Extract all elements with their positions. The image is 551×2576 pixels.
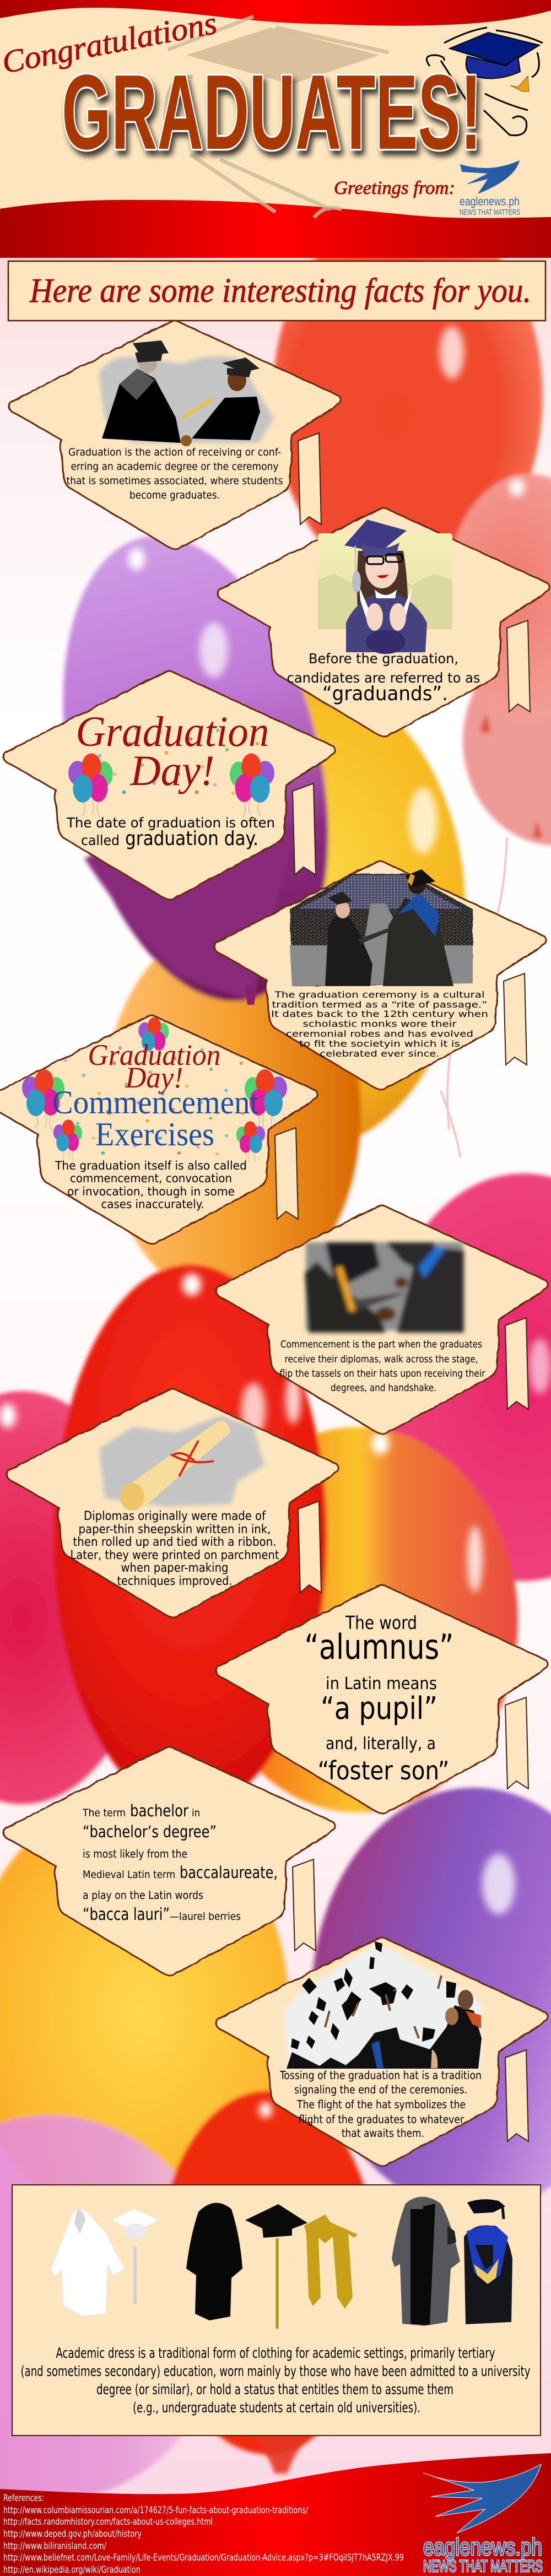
caption: celebrated ever since. (320, 1048, 440, 1059)
caption (287, 651, 480, 705)
cap shape (7, 1389, 339, 1617)
caption: baccalaureate, (180, 1863, 278, 1882)
fact cap 10: tossing hats (216, 1938, 548, 2166)
fact cap 9: bachelor (3, 1747, 336, 1976)
caption: “bachelor’s degree” (83, 1822, 217, 1841)
illustration: rolled diploma (99, 1416, 264, 1511)
caption: or invocation, though in some (67, 1185, 235, 1198)
references: http://www.deped.gov.ph/about/history (3, 2529, 142, 2540)
bookmark ribbon (504, 973, 527, 1065)
caption: to fit the societyin which it is (299, 1038, 460, 1049)
caption: that awaits them. (342, 2126, 424, 2140)
references (3, 2493, 404, 2575)
artwork: Graduation Day: Graduation (76, 707, 269, 755)
caption (280, 1339, 485, 1394)
cap shape (216, 1205, 548, 1434)
references: http://en.wikipedia.org/wiki/Graduation (3, 2564, 141, 2575)
photo: tossed caps (284, 1941, 482, 2069)
caption: Later, they were printed on parchment (71, 1549, 279, 1562)
caption: erring an academic degree or the ceremony (71, 461, 279, 473)
panel: academic dress (12, 2185, 541, 2436)
cap shape (3, 1747, 336, 1976)
caption: “a pupil” (321, 1691, 437, 1727)
caption: receive their diplomas, walk across the stage, (284, 1354, 478, 1365)
references: http://facts.randomhistory.com/facts-about-us-colleges.html (3, 2517, 213, 2528)
cap shape (218, 508, 550, 737)
bookmark ribbon (507, 620, 530, 712)
artwork: commencement exercises: Graduation (88, 1038, 220, 1071)
heading: Congratulations: Congratulations (0, 5, 220, 80)
logo: eaglenews: eaglenews.ph (460, 194, 520, 208)
photo: ceremony handshake (290, 869, 473, 986)
black gown, cap, tassel and gold stole (186, 2203, 358, 2329)
caption (55, 1159, 247, 1211)
logo: eaglenews footer (423, 2464, 543, 2575)
caption: then rolled up and tied with a ribbon. (73, 1535, 277, 1549)
caption: Graduation is the action of receiving or conf- (68, 446, 281, 458)
caption: scholastic monks wore their (303, 1019, 457, 1029)
caption: is most likely from the (83, 1847, 187, 1860)
caption (66, 815, 275, 850)
caption (66, 446, 283, 501)
references: http://www.biliranisland.com/ (3, 2541, 107, 2552)
fact cap 7: diplomas (7, 1389, 339, 1617)
references: http://www.columbiamissourian.com/a/174627/5-fun-facts-about-graduation-traditions/ (3, 2505, 309, 2516)
caption: candidates are referred to as (287, 670, 480, 686)
caption: called (81, 832, 120, 848)
caption (71, 1509, 279, 1588)
artwork: Graduation Day (68, 707, 274, 818)
bookmark ribbon (505, 1697, 528, 1789)
header panel (0, 0, 551, 258)
bookmark ribbon (298, 1501, 321, 1593)
caption: The date of graduation is often (66, 815, 275, 831)
caption: degrees, and handshake. (331, 1382, 436, 1394)
caption (304, 1612, 454, 1785)
caption: tradition termed as a “rite of passage.” (272, 999, 487, 1010)
bookmark ribbon (298, 433, 321, 524)
caption: Before the graduation, (309, 651, 458, 667)
caption: The graduation ceremony is a cultural (274, 989, 485, 1000)
caption: “bacca lauri” (83, 1905, 170, 1924)
caption: Tossing of the graduation hat is a tradition (279, 2069, 482, 2082)
cap shape (0, 1015, 318, 1244)
doctoral gown, tam and hood (392, 2197, 512, 2326)
bookmark ribbon (293, 1859, 316, 1951)
caption: bachelor (130, 1801, 188, 1820)
fact cap 8: alumnus (216, 1585, 548, 1814)
references: http://www.beliefnet.com/Love-Family/Life-Events/Graduation/Graduation-Advice.aspx?p=3#FOqiISJT7hA5RZJX.99 (3, 2552, 404, 2563)
caption: flight of the graduates to whatever (299, 2113, 464, 2126)
caption: cases inaccurately. (101, 1198, 204, 1211)
photo: diploma handshake close-up (305, 1242, 464, 1333)
caption: —laurel berries (170, 1911, 241, 1923)
caption (279, 2069, 482, 2140)
bookmark ribbon (505, 2050, 528, 2141)
caption: become graduates. (129, 489, 220, 501)
caption: Commencement is the part when the graduates (280, 1339, 482, 1350)
caption: (e.g., undergraduate students at certain old universities). (133, 2400, 420, 2416)
logo: eaglenews: NEWS THAT MATTERS (460, 208, 520, 217)
caption (21, 2345, 531, 2416)
caption: “graduands”. (322, 683, 448, 705)
caption: degree (or similar), or hold a status that entitles them to assume them (96, 2382, 453, 2398)
cap shape (9, 321, 341, 549)
icon: graduation cap and diploma (426, 28, 543, 136)
fact cap 2: graduands (218, 508, 550, 737)
caption: “foster son” (317, 1756, 450, 1785)
caption: “alumnus” (304, 1627, 454, 1667)
caption: and, literally, a (326, 1734, 436, 1754)
caption: The flight of the hat symbolizes the (296, 2098, 466, 2111)
caption: when paper-making (121, 1561, 228, 1575)
caption: The graduation itself is also called (55, 1159, 247, 1172)
caption: Medieval Latin term (83, 1869, 175, 1881)
footer band (0, 2453, 551, 2576)
banner: interesting facts (8, 261, 545, 321)
bookmark ribbon (293, 783, 316, 875)
caption: commencement, convocation (70, 1172, 232, 1185)
bookmark ribbon (505, 1318, 528, 1409)
white gown, cap and tassel (51, 2209, 159, 2316)
caption: in (192, 1807, 200, 1819)
artwork: commencement exercises: Commencement (52, 1084, 259, 1121)
fact cap 1: definition of graduation (9, 321, 341, 549)
caption: It dates back to the 12th century when (271, 1009, 488, 1019)
illustration: girl graduate (318, 519, 452, 654)
cap shape (216, 1585, 548, 1814)
logo: eaglenews (460, 160, 520, 217)
caption (271, 989, 488, 1059)
cap shape (214, 861, 547, 1090)
artwork: commencement exercises: Exercises (95, 1116, 214, 1152)
bookmark ribbon (275, 1128, 298, 1219)
cap shape (3, 671, 336, 900)
fact cap 4: rite of passage (214, 861, 547, 1090)
fact cap 3: graduation day (3, 671, 336, 900)
artwork: commencement exercises (22, 1017, 287, 1163)
caption: a play on the Latin words (83, 1888, 203, 1902)
caption: The term (82, 1807, 126, 1819)
faint cap watermark (165, 17, 388, 218)
artwork: Graduation Day: Day! (130, 746, 215, 794)
references: References: (3, 2493, 44, 2504)
caption: that is sometimes associated, where students (66, 475, 283, 487)
fact cap 6: commencement definition (216, 1205, 548, 1434)
caption (82, 1801, 278, 1924)
artwork: commencement exercises: Day! (125, 1061, 183, 1094)
caption: The word (345, 1612, 417, 1633)
cap shape (216, 1938, 548, 2166)
caption: paper-thin sheepskin written in ink, (78, 1523, 271, 1536)
caption: in Latin means (326, 1674, 437, 1693)
caption: ceremonial robes and has evolved (286, 1029, 473, 1039)
caption: graduation day. (125, 827, 258, 850)
caption: signaling the end of the ceremonies. (294, 2083, 467, 2096)
caption: techniques improved. (117, 1574, 233, 1588)
illustration: diploma handover (99, 340, 274, 446)
fact cap 5: commencement exercises (0, 1015, 318, 1244)
text: greetings from: Greetings from: (334, 178, 455, 198)
caption: flip the tassels on their hats upon receiving their (280, 1368, 485, 1379)
caption: Diplomas originally were made of (84, 1509, 266, 1523)
